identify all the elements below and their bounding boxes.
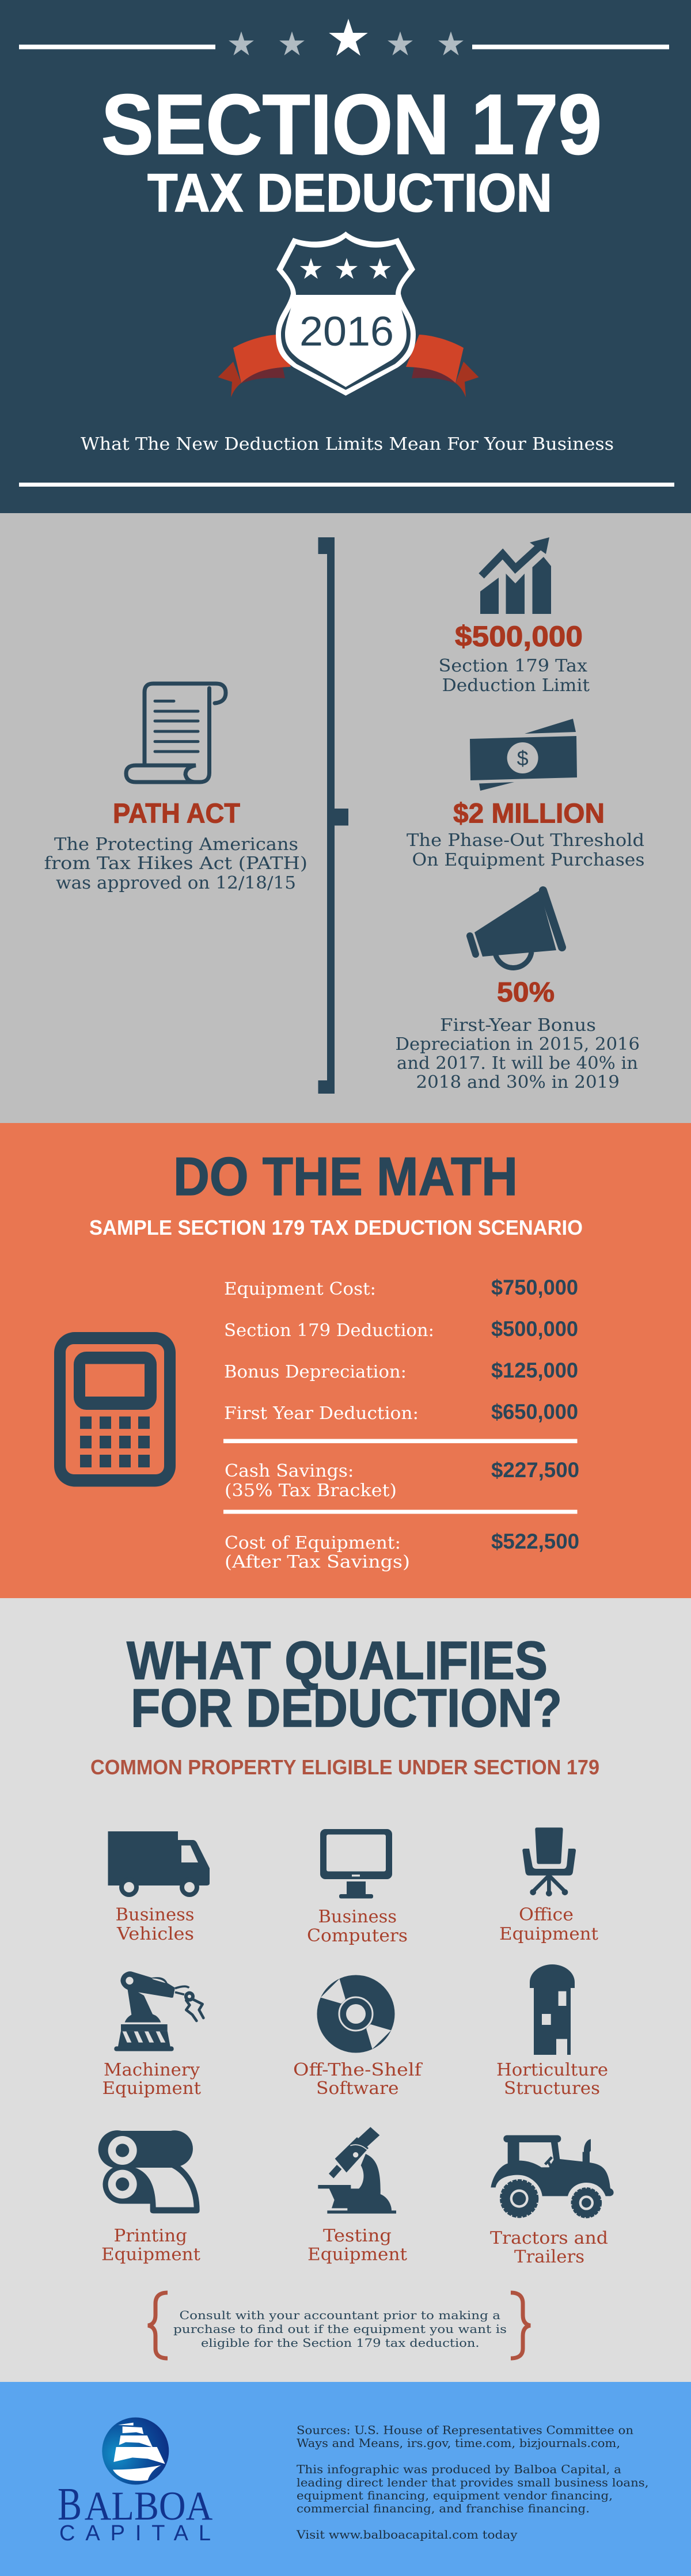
table: scenario labels: (35% Tax Bracket) xyxy=(225,1481,397,1501)
callout: consult your accountant: eligible for the Section 179 tax deduction. xyxy=(201,2336,480,2350)
table: scenario labels: Cash Savings: xyxy=(225,1461,354,1481)
icon: shield badge with ribbon xyxy=(218,232,479,397)
callout: consult your accountant xyxy=(148,2293,530,2358)
text: PATH act description: The Protecting Americans xyxy=(54,834,298,855)
text: threshold description: The Phase-Out Threshold xyxy=(407,830,644,851)
icon: silo xyxy=(530,1964,575,2055)
label: Vehicles xyxy=(116,1924,194,1944)
text: bonus depreciation description xyxy=(395,1015,640,1092)
icon: robot arm xyxy=(114,1971,203,2051)
heading: do the math: DO THE MATH xyxy=(173,1146,518,1207)
stat: $2 million: $2 MILLION xyxy=(453,799,605,829)
label: Office xyxy=(519,1905,574,1925)
label: Equipment xyxy=(101,2245,200,2265)
text: threshold description: On Equipment Purchases xyxy=(412,850,645,870)
icon: shield badge with ribbon: 2016 xyxy=(299,309,394,355)
subtitle heading: TAX DEDUCTION xyxy=(147,162,552,223)
table: scenario labels: First Year Deduction: xyxy=(224,1403,419,1424)
label: Tractors and xyxy=(490,2228,608,2248)
label: Business xyxy=(115,1905,195,1925)
label: Off-The-Shelf xyxy=(293,2060,423,2080)
text: bonus depreciation description: First-Year Bonus xyxy=(440,1015,596,1035)
label: Printing xyxy=(114,2226,187,2246)
bracket divider xyxy=(318,537,348,1094)
label xyxy=(115,1905,195,1944)
panel: what qualifies xyxy=(0,1598,691,2382)
label: Equipment xyxy=(102,2078,201,2099)
label xyxy=(490,2228,608,2267)
icon: megaphone xyxy=(470,890,562,968)
title: SECTION 179 xyxy=(101,77,602,172)
icon: scroll xyxy=(126,684,226,782)
heading: what qualifies for deduction: WHAT QUALIFIES xyxy=(127,1630,548,1691)
logo: Balboa Capital xyxy=(58,2418,212,2545)
text: sources and about: commercial financing, and franchise financing. xyxy=(297,2502,590,2516)
label xyxy=(102,2060,201,2099)
icon: calculator xyxy=(54,1332,176,1487)
table: scenario values: $522,500 xyxy=(491,1530,579,1553)
label xyxy=(293,2060,423,2099)
subheading: common property: COMMON PROPERTY ELIGIBLE UNDER SECTION 179 xyxy=(90,1755,599,1779)
table: scenario values: $750,000 xyxy=(491,1276,578,1299)
text: sources and about: equipment financing, equipment vendor financing, xyxy=(297,2488,613,2502)
text: sources and about: Sources: U.S. House of Representatives Committee on xyxy=(297,2423,633,2437)
icon: tractor xyxy=(491,2135,614,2218)
stat: $500,000: $500,000 xyxy=(455,620,583,652)
text: sources and about: Visit www.balboacapital.com today xyxy=(296,2528,518,2541)
table: scenario labels: Bonus Depreciation: xyxy=(224,1362,407,1382)
text: sources and about: Ways and Means, irs.gov, time.com, bizjournals.com, xyxy=(297,2436,620,2450)
item: business computers xyxy=(307,1829,408,1946)
label xyxy=(307,1907,408,1946)
heading: what qualifies for deduction: FOR DEDUCTION? xyxy=(131,1678,562,1738)
table: scenario values: $125,000 xyxy=(491,1359,578,1382)
text: PATH act description: from Tax Hikes Act (PATH) xyxy=(44,853,307,874)
table: scenario values xyxy=(491,1276,579,1553)
panel: do the math xyxy=(0,1123,691,1598)
label xyxy=(101,2226,200,2265)
text: bonus depreciation description: 2018 and 30% in 2019 xyxy=(416,1072,620,1092)
table: scenario values: $650,000 xyxy=(491,1400,578,1424)
text: threshold description xyxy=(407,830,645,870)
icon: money: $ xyxy=(517,746,529,770)
label: Horticulture xyxy=(496,2060,608,2080)
text: bonus depreciation description: and 2017. It will be 40% in xyxy=(397,1053,638,1073)
label xyxy=(496,2060,608,2099)
wordmark: capital: CAPITAL xyxy=(59,2521,211,2545)
label: Equipment xyxy=(499,1924,598,1944)
text: sources and about xyxy=(296,2423,648,2541)
panel: deduction limits xyxy=(0,513,691,1123)
table: scenario labels: Cost of Equipment: xyxy=(225,1533,401,1553)
heading: PATH ACT: PATH ACT xyxy=(113,799,240,829)
panel: header xyxy=(0,0,691,513)
table: scenario values: $500,000 xyxy=(491,1317,578,1341)
label xyxy=(307,2226,407,2265)
text: PATH act description xyxy=(44,834,307,893)
icon: microscope xyxy=(318,2127,396,2214)
label: Trailers xyxy=(514,2247,584,2267)
text: sources and about: This infographic was produced by Balboa Capital, a xyxy=(297,2463,621,2476)
label: Testing xyxy=(323,2226,392,2246)
text: bonus depreciation description: Depreciation in 2015, 2016 xyxy=(395,1034,640,1054)
table: scenario values: $227,500 xyxy=(491,1458,579,1482)
heading: what qualifies for deduction xyxy=(127,1630,562,1738)
table: scenario labels: Equipment Cost: xyxy=(224,1279,376,1299)
label: Machinery xyxy=(104,2060,200,2080)
subheading: sample scenario: SAMPLE SECTION 179 TAX DEDUCTION SCENARIO xyxy=(89,1216,583,1239)
icon: disc xyxy=(317,1975,395,2053)
table: scenario labels: (After Tax Savings) xyxy=(225,1552,410,1572)
stat: 50%: 50% xyxy=(497,977,555,1008)
table: scenario labels xyxy=(224,1279,434,1572)
item: office equipment xyxy=(499,1827,598,1944)
icon: truck xyxy=(108,1831,210,1897)
label: Business xyxy=(318,1907,397,1927)
label xyxy=(499,1905,598,1944)
wordmark xyxy=(58,2479,212,2530)
text: PATH act description: was approved on 12/18/15 xyxy=(56,873,296,893)
item: printing equipment xyxy=(98,2130,200,2265)
text: limit description xyxy=(439,656,590,696)
text: limit description: Section 179 Tax xyxy=(439,656,587,676)
item: tractors and trailers xyxy=(490,2135,614,2267)
icon: office chair xyxy=(522,1827,576,1896)
tagline: What The New Deduction Limits Mean For Your Business xyxy=(81,434,614,454)
text: sources and about: leading direct lender that provides small business loans, xyxy=(297,2475,648,2489)
callout: consult your accountant: Consult with your accountant prior to making a xyxy=(180,2308,500,2322)
wordmark: B xyxy=(58,2479,82,2530)
icon: ship emblem xyxy=(102,2418,169,2484)
icon: monitor xyxy=(320,1829,392,1898)
label: Computers xyxy=(307,1926,408,1946)
icon: money xyxy=(470,719,577,791)
icon: printing rollers xyxy=(98,2130,200,2213)
item: testing equipment xyxy=(307,2127,407,2265)
table: scenario labels: Section 179 Deduction: xyxy=(224,1321,434,1341)
label: Structures xyxy=(504,2078,600,2099)
label: Equipment xyxy=(307,2245,407,2265)
label: Software xyxy=(316,2078,399,2099)
item: business vehicles xyxy=(108,1831,210,1944)
callout: consult your accountant: purchase to find out if the equipment you want is xyxy=(173,2322,507,2336)
text: limit description: Deduction Limit xyxy=(442,676,590,696)
icon: rising bar chart xyxy=(480,537,551,614)
top divider with stars xyxy=(19,18,669,56)
panel: footer xyxy=(0,2382,691,2576)
wordmark: ALBOA xyxy=(85,2484,212,2529)
item: off-the-shelf software xyxy=(293,1975,423,2099)
item: horticulture structures xyxy=(496,1964,608,2099)
item: machinery equipment xyxy=(102,1971,203,2099)
